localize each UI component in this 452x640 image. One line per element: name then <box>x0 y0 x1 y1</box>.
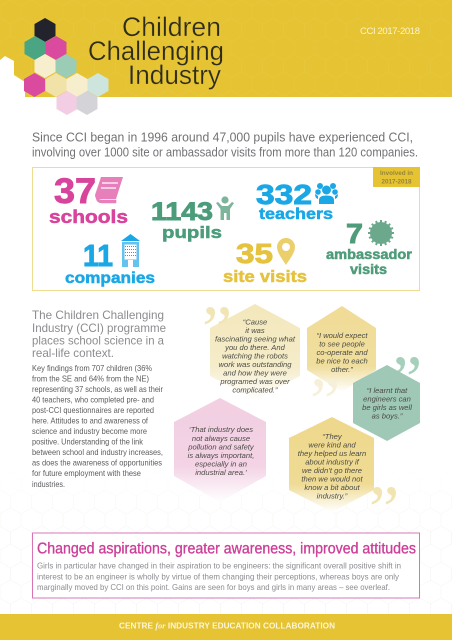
key findings text: industries. <box>32 479 65 489</box>
panel: statistics <box>32 167 420 290</box>
quote: robots: programed was over <box>219 377 290 386</box>
panel: changed aspirations <box>32 533 420 598</box>
intro text <box>32 130 418 160</box>
icon: book <box>95 177 123 203</box>
quote mark: ” <box>369 471 399 547</box>
quote: co-operate: to see people <box>319 340 365 348</box>
quote: robots: it was <box>245 326 265 335</box>
stat: companies: companies <box>65 270 155 287</box>
programme heading <box>32 308 166 360</box>
quote: pollution: especially in an <box>195 460 247 468</box>
stat: teachers: 332 <box>256 179 312 210</box>
quote: engineers <box>353 341 422 441</box>
quote: learning: were kind and <box>308 440 356 450</box>
quote: robots <box>202 291 300 400</box>
quote: learning: about industry if <box>305 458 360 466</box>
involved tag: 2017-2018 <box>381 178 412 186</box>
quote: pollution <box>174 398 266 502</box>
stat: ambassador visits <box>326 218 413 277</box>
stat: ambassador visits: ambassador <box>326 247 413 262</box>
quote: engineers: as boys.” <box>372 412 403 420</box>
logo hexagons <box>24 18 108 115</box>
key findings text: science and industry become more <box>32 426 147 436</box>
title: Children <box>122 12 221 42</box>
title: Industry <box>128 60 222 90</box>
key findings text <box>32 363 163 489</box>
stat: pupils: 1143 <box>151 198 213 226</box>
stat: pupils: pupils <box>162 224 222 242</box>
quote: robots: you do there. And <box>224 343 286 352</box>
key findings text: positive. Understanding of the link <box>32 436 144 446</box>
stat: schools: schools <box>49 207 128 227</box>
quote: robots: fascinating seeing what <box>215 334 296 344</box>
key findings text: as does the awareness of opportunities <box>32 458 162 468</box>
quote: pollution: is always important, <box>188 451 254 460</box>
key findings text: here. Attitudes to and awareness of <box>32 416 149 426</box>
quote: robots: complicated.” <box>232 386 278 394</box>
quote: learning: then we would not <box>301 474 363 484</box>
quote: co-operate: “I would expect <box>316 331 368 340</box>
icon: person <box>216 196 234 220</box>
stat: ambassador visits: visits <box>350 262 387 277</box>
intro text: Since CCI began in 1996 around 47,000 pupils have experienced CCI, <box>32 130 413 144</box>
key findings text: Key findings from 707 children (36% <box>32 363 153 373</box>
key findings text: between school and industry increases, <box>32 447 163 457</box>
key findings text: representing 37 schools, as well as their <box>32 384 163 394</box>
panel heading: Changed aspirations, greater awareness, improved attitudes <box>37 540 416 558</box>
quote mark: ” <box>392 341 422 417</box>
involved tag: Involved in <box>380 170 413 177</box>
intro text: involving over 1000 site or ambassador visits from more than 120 companies. <box>32 146 418 160</box>
stat: schools: 37 <box>54 172 96 211</box>
icon: building <box>121 234 140 267</box>
key findings text: from the SE and 64% from the NE) <box>32 374 149 384</box>
quote: learning <box>289 417 399 547</box>
stat: companies <box>65 234 155 287</box>
quote: learning: know a bit about <box>304 483 361 492</box>
icon: seal <box>368 220 394 246</box>
programme heading: Industry (CCI) programme <box>32 321 166 335</box>
lower honeycomb background <box>0 470 452 614</box>
stat: site visits: 35 <box>236 238 273 269</box>
quote mark: ” <box>310 363 340 439</box>
title: Challenging <box>88 36 224 66</box>
programme heading: real-life context. <box>32 346 114 360</box>
panel body <box>37 562 401 592</box>
icon: group of people <box>315 183 338 204</box>
panel body: Girls in particular have changed in their aspiration to be engineers: the significant overall positive shift in <box>37 562 401 570</box>
stat: companies: 11 <box>83 238 113 273</box>
stat: schools <box>49 172 128 227</box>
stat: teachers: teachers <box>259 206 333 223</box>
quote: co-operate: other.” <box>331 365 353 374</box>
quote: co-operate: co-operate and <box>316 348 368 357</box>
quote: co-operate <box>307 306 376 439</box>
quote: learning: industry.” <box>317 492 348 500</box>
quote: pollution: ‘That industry does <box>189 425 253 434</box>
quote: robots: “Cause <box>243 318 267 326</box>
key findings text: for future employment with these <box>32 468 141 478</box>
panel body: interest to be an engineer is wholly by virtue of them changing their perceptions, whereas boys are only <box>37 572 400 582</box>
key findings text: 40 teachers, who completed pre- and <box>32 394 154 404</box>
quote: learning: “They <box>322 432 343 441</box>
edition label: CCI 2017-2018 <box>360 26 420 37</box>
quote: pollution: pollution and safety <box>187 442 255 452</box>
footer band: CENTRE for INDUSTRY EDUCATION COLLABORATION <box>119 622 335 630</box>
quote mark: ” <box>202 291 232 367</box>
stat: pupils <box>151 196 234 242</box>
quote: pollution: not always cause <box>192 434 250 443</box>
quote: learning: we didn’t go there <box>302 466 362 475</box>
involved tag <box>373 167 420 187</box>
quote: engineers: “I learnt that <box>367 386 408 395</box>
programme heading: places school science in a <box>32 334 164 348</box>
stat: ambassador visits: 7 <box>346 218 363 249</box>
quote: co-operate: be nice to each <box>316 356 368 366</box>
stat: site visits: site visits <box>223 268 307 286</box>
quote: engineers: be girls as well <box>362 403 412 412</box>
quote: pollution: industrial area.’ <box>195 468 247 477</box>
stat: teachers <box>256 179 338 223</box>
icon: map pin <box>277 238 295 265</box>
quote: engineers: engineers can <box>363 394 411 404</box>
stat: site visits <box>223 238 307 286</box>
quote: robots: work was outstanding <box>218 360 292 369</box>
quote: learning: they helped us learn <box>298 449 366 458</box>
programme heading: The Children Challenging <box>32 308 164 322</box>
title <box>88 12 224 90</box>
quote: robots: and how they were <box>223 368 287 378</box>
header banner <box>0 0 452 97</box>
quote: robots: watching the robots <box>222 352 288 360</box>
key findings text: post-CCI questionnaires are reported <box>32 405 154 415</box>
panel body: marginally moved by CCI on this point. Gains are seen for boys and girls in many areas – see overleaf. <box>37 583 390 592</box>
footer band <box>0 614 452 640</box>
